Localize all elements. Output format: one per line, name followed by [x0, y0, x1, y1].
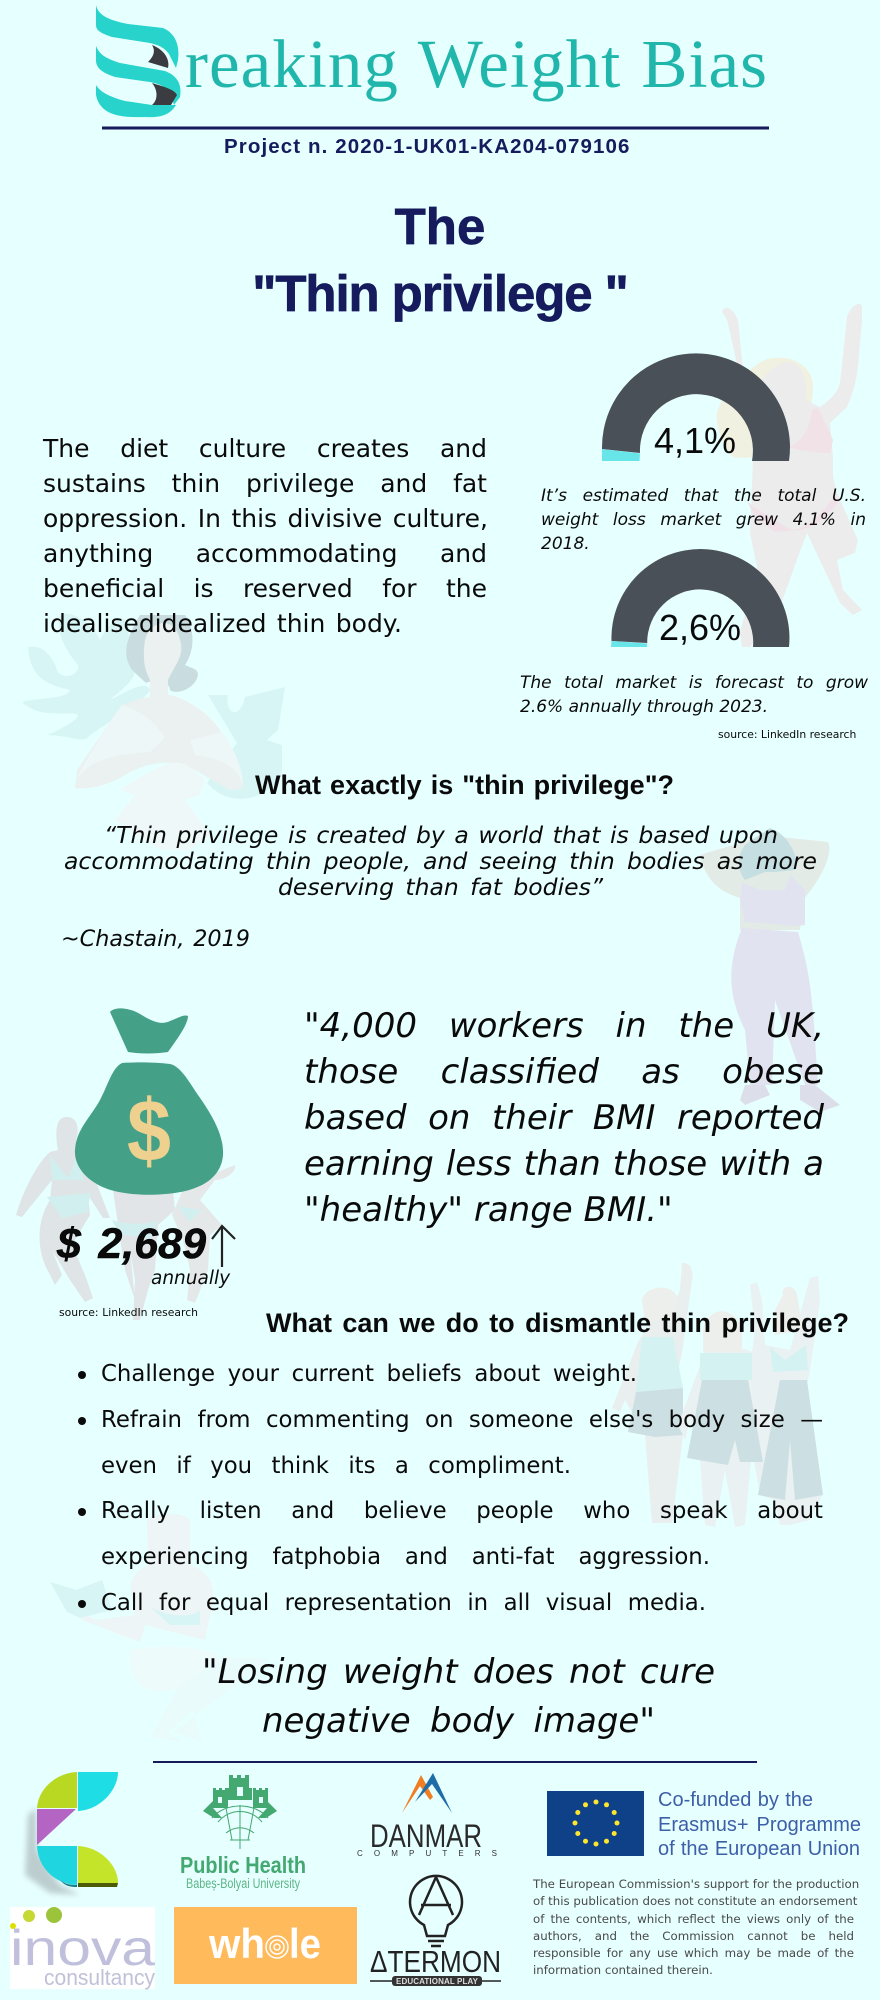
text: intro paragraph	[42, 434, 488, 638]
gauge value 4,1%: 4,1%	[654, 420, 736, 461]
quote: workers earnings: earning less than those with a	[304, 1144, 824, 1184]
quote: Chastain definition: ~Chastain, 2019	[61, 926, 250, 952]
logo: ribbon B	[96, 5, 180, 117]
stat label: annually: annually	[151, 1268, 230, 1288]
text: EU disclaimer: The European Commission's support for the production	[533, 1877, 859, 1891]
gauge: 4.1 percent	[602, 353, 790, 461]
logo: inova consultancy	[10, 1907, 155, 1990]
quote: workers earnings: "healthy" range BMI."	[304, 1190, 673, 1230]
project number: Project n. 2020-1-UK01-KA204-079106	[224, 135, 631, 158]
quote: Chastain definition	[61, 821, 817, 952]
list: actions: even if you think its a compliment.	[101, 1453, 571, 1479]
text: EU disclaimer: responsible for any use which may be made of the	[533, 1946, 854, 1960]
list: actions: Refrain from commenting on someone else's body size —	[101, 1407, 823, 1433]
source note 2: source: LinkedIn research	[59, 1306, 198, 1319]
quote: Chastain definition: accommodating thin people, and seeing thin bodies as more	[64, 847, 817, 875]
gauge caption 2: The total market is forecast to grow	[520, 673, 868, 693]
quote: Chastain definition: deserving than fat bodies”	[278, 873, 603, 901]
text: EU disclaimer	[532, 1877, 859, 1977]
quote: workers earnings	[304, 1006, 824, 1230]
closing quote: "Losing weight does not cure	[202, 1652, 715, 1692]
logo: Danmar Computers: COMPUTERS	[357, 1849, 497, 1858]
logo: Public Health	[180, 1775, 306, 1891]
quote: Chastain definition: “Thin privilege is created by a world that is based upon	[104, 821, 778, 849]
figure: three women in swimwear	[16, 1117, 235, 1320]
text: EU disclaimer: authors, and the Commission cannot be held	[533, 1929, 854, 1943]
logo: whole	[174, 1907, 357, 1984]
logo: Atermon educational play	[370, 1876, 501, 1986]
title line 2: "Thin privilege "	[252, 265, 628, 322]
closing quote: negative body image"	[262, 1701, 655, 1741]
gauge caption 1: 2018.	[541, 534, 590, 554]
logo: Atermon educational play: EDUCATIONAL PLAY	[396, 1977, 479, 1986]
logo: Danmar Computers: DANMAR	[370, 1818, 482, 1854]
heading: dismantle thin privilege: What can we do to dismantle thin privilege?	[266, 1308, 849, 1338]
text: intro paragraph: anything accommodating and	[43, 539, 487, 568]
title line 1: The	[395, 198, 485, 255]
text: EU disclaimer: of the contents, which reflect the views only of the	[533, 1912, 854, 1926]
text: intro paragraph: The diet culture creates and	[43, 434, 487, 463]
list: actions: Really listen and believe people who speak about	[101, 1498, 823, 1524]
text: intro paragraph: sustains thin privilege and fat	[43, 469, 487, 498]
figure: woman with raised arms	[717, 304, 862, 647]
figure: three women with raised fists	[612, 1263, 823, 1527]
logo: inova consultancy: consultancy	[44, 1965, 155, 1990]
gauge caption 1: It’s estimated that the total U.S.	[541, 486, 866, 506]
list: actions: experiencing fatphobia and anti-fat aggression.	[101, 1544, 710, 1570]
divider: header rule	[102, 126, 769, 130]
text: intro paragraph: beneficial is reserved for the	[43, 574, 487, 603]
gauge caption 1: weight loss market grew 4.1% in	[541, 510, 866, 530]
quote: workers earnings: those classified as obese	[304, 1052, 824, 1092]
logo: partner C shape	[25, 1772, 118, 1895]
logo: whole: le	[289, 1920, 321, 1967]
text: Co-funded by Erasmus+: Erasmus+ Programme	[658, 1814, 861, 1836]
logo: Public Health: Public Health	[180, 1852, 306, 1878]
icon: money bag: $	[127, 1081, 171, 1180]
quote: workers earnings: "4,000 workers in the UK,	[304, 1006, 824, 1046]
logo: Danmar Computers	[357, 1773, 497, 1858]
figure: woman with heart hands and leaves	[22, 614, 285, 850]
stat: annual earnings gap: $ 2,689	[57, 1220, 206, 1268]
list: actions: Challenge your current beliefs about weight.	[101, 1361, 637, 1387]
text: intro paragraph: oppression. In this divisive culture,	[43, 504, 488, 533]
logo: whole: wh	[208, 1920, 265, 1967]
figure: woman with hands behind head	[700, 828, 840, 1112]
list: actions: Call for equal representation in all visual media.	[101, 1590, 706, 1616]
quote: workers earnings: based on their BMI reported	[304, 1098, 824, 1138]
text: Co-funded by Erasmus+: of the European Union	[658, 1838, 860, 1860]
bullets	[78, 1371, 86, 1608]
gauge caption 1	[541, 486, 866, 554]
text: Co-funded by Erasmus+: Co-funded by the	[658, 1789, 813, 1811]
closing quote	[202, 1652, 715, 1741]
gauge value 2,6%: 2,6%	[659, 607, 741, 648]
figure: person reading a book	[50, 1514, 270, 1742]
logo: Atermon educational play: ΔTERMON	[370, 1944, 501, 1979]
source note 1: source: LinkedIn research	[718, 728, 856, 741]
gauge caption 2: 2.6% annually through 2023.	[520, 697, 768, 717]
text: EU disclaimer: of this publication does not constitute an endorsement	[533, 1894, 857, 1908]
text: EU disclaimer: information contained therein.	[533, 1963, 713, 1977]
text: Co-funded by Erasmus+	[658, 1789, 861, 1860]
heading: What exactly is thin privilege: What exactly is "thin privilege"?	[255, 770, 674, 800]
list: actions	[101, 1361, 823, 1616]
logo: inova consultancy: inova	[10, 1920, 155, 1976]
text: intro paragraph: idealisedidealized thin body.	[43, 609, 402, 638]
gauge caption 2	[520, 673, 868, 717]
heading: Breaking Weight Bias: reaking Weight Bias	[185, 26, 768, 102]
arrow: up	[212, 1226, 235, 1267]
logo: Public Health: Babeș-Bolyai University	[186, 1876, 300, 1891]
logo: EU flag	[547, 1791, 644, 1856]
divider: footer rule	[153, 1761, 757, 1763]
title	[252, 198, 628, 322]
icon: money bag	[75, 1008, 223, 1195]
gauge: 2.6 percent	[611, 549, 789, 647]
